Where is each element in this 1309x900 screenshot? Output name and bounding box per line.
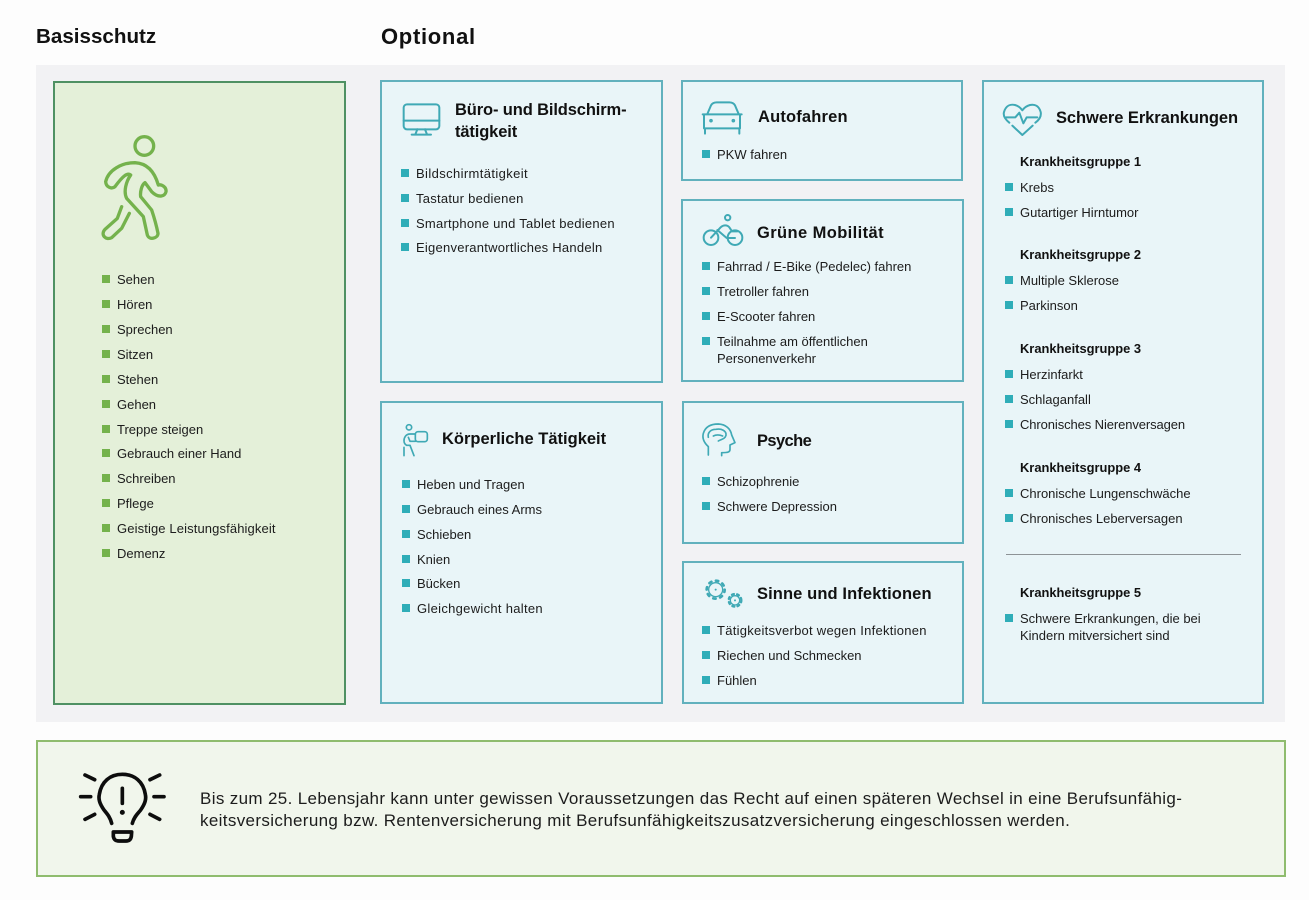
list: Sinne items: Fühlen — [717, 673, 757, 688]
callout text: keitsversicherung bzw. Rentenversicherung mit Berufsunfähigkeitszusatzversicherung eingeschlossen werden. — [200, 811, 1070, 830]
icon: walking person — [102, 135, 168, 240]
group 3: Krankheitsgruppe 3 — [1020, 341, 1141, 356]
icon: person carrying box — [403, 424, 428, 456]
icon: gears — [705, 579, 742, 608]
heading: Autofahren: Autofahren — [758, 108, 848, 126]
list: Büro items: Tastatur bedienen — [416, 191, 524, 206]
group 4 — [1005, 460, 1191, 526]
panel: Basisschutz — [53, 81, 346, 705]
list: Basisschutz items: Hören — [117, 297, 152, 312]
icon: cyclist — [702, 214, 744, 246]
panel: Grüne Mobilität — [681, 199, 964, 382]
list: Grüne Mobilität items: Tretroller fahren — [717, 284, 809, 299]
list: Körperliche items: Gebrauch eines Arms — [417, 502, 542, 517]
heading: Sinne und Infektionen: Sinne und Infektionen — [757, 585, 932, 603]
heading: Basisschutz: Basisschutz — [36, 25, 156, 48]
grey background panel — [36, 65, 1285, 722]
list: Büro items: Smartphone und Tablet bedienen — [416, 216, 615, 231]
list: Psyche items: Schizophrenie — [717, 474, 799, 489]
group 4: Krankheitsgruppe 4 — [1020, 460, 1141, 475]
icon: light bulb — [78, 772, 166, 843]
list: Sinne items: Riechen und Schmecken — [717, 648, 862, 663]
list: Basisschutz items: Gehen — [117, 397, 156, 412]
icon: monitor — [402, 103, 440, 136]
list: Grüne Mobilität items — [702, 259, 911, 366]
group 5: Krankheitsgruppe 5 — [1020, 585, 1141, 600]
list: Sinne items — [702, 623, 927, 688]
heading: Schwere Erkrankungen: Schwere Erkrankungen — [1056, 109, 1238, 127]
list: Basisschutz items: Pflege — [117, 496, 154, 511]
list: Grüne Mobilität items: Teilnahme am öffentlichen — [717, 334, 868, 349]
icon: head with brain — [702, 423, 736, 456]
heading: Optional: Optional — [381, 24, 476, 49]
heading: Psyche: Psyche — [757, 432, 811, 450]
list: Basisschutz items: Sehen — [117, 272, 155, 287]
group 5 — [1005, 585, 1201, 643]
group 3 — [1005, 341, 1185, 432]
list: Psyche items — [702, 474, 837, 514]
callout text: Bis zum 25. Lebensjahr kann unter gewissen Voraussetzungen das Recht auf einen späteren Wechsel in eine Berufsunfähig- — [200, 789, 1182, 808]
icon: heart with pulse — [1002, 104, 1042, 136]
panel: Sinne und Infektionen — [682, 561, 964, 704]
list: Basisschutz items: Demenz — [117, 546, 165, 561]
heading: Körperliche Tätigkeit: Körperliche Tätigkeit — [442, 430, 606, 448]
list: Büro items: Eigenverantwortliches Handeln — [416, 240, 602, 255]
group 3: Herzinfarkt — [1020, 367, 1083, 382]
list: Körperliche items — [402, 477, 543, 616]
group 5: Kindern mitversichert sind — [1020, 628, 1170, 643]
list: Basisschutz items: Schreiben — [117, 471, 176, 486]
panel: Schwere Erkrankungen — [982, 80, 1264, 704]
list: Psyche items: Schwere Depression — [717, 499, 837, 514]
list: Grüne Mobilität items: Personenverkehr — [717, 351, 816, 366]
list: Basisschutz items: Gebrauch einer Hand — [117, 446, 241, 461]
group 3: Chronisches Nierenversagen — [1020, 417, 1185, 432]
list: Körperliche items: Heben und Tragen — [417, 477, 525, 492]
group 1: Krankheitsgruppe 1 — [1020, 154, 1141, 169]
list: Basisschutz items: Geistige Leistungsfähigkeit — [117, 521, 276, 536]
callout panel — [36, 740, 1286, 877]
list: Körperliche items: Knien — [417, 552, 450, 567]
list: Sinne items: Tätigkeitsverbot wegen Infektionen — [717, 623, 927, 638]
list: Basisschutz items: Treppe steigen — [117, 422, 203, 437]
callout text — [200, 789, 1182, 830]
group 2: Multiple Sklerose — [1020, 273, 1119, 288]
group 2: Krankheitsgruppe 2 — [1020, 247, 1141, 262]
icon: car — [702, 101, 743, 135]
group 2: Parkinson — [1020, 298, 1078, 313]
list: Körperliche items: Bücken — [417, 576, 460, 591]
panel: Psyche — [682, 401, 964, 544]
heading: Büro- und Bildschirmtätigkeit: Büro- und Bildschirm- — [455, 101, 626, 119]
list: Grüne Mobilität items: E-Scooter fahren — [717, 309, 815, 324]
list: Basisschutz items — [102, 272, 276, 561]
heading: Büro- und Bildschirmtätigkeit — [455, 101, 626, 141]
panel: Büro- und Bildschirmtätigkeit — [380, 80, 663, 383]
list: Büro items: Bildschirmtätigkeit — [416, 166, 528, 181]
list: Grüne Mobilität items: Fahrrad / E-Bike (Pedelec) fahren — [717, 259, 911, 274]
group 4: Chronisches Leberversagen — [1020, 511, 1183, 526]
group 2 — [1005, 247, 1141, 313]
list: Büro items — [401, 166, 615, 255]
panel: Autofahren — [681, 80, 963, 181]
list: Basisschutz items: Sprechen — [117, 322, 173, 337]
heading: Grüne Mobilität: Grüne Mobilität — [757, 224, 884, 242]
panel: Körperliche Tätigkeit — [380, 401, 663, 704]
list: Basisschutz items: Sitzen — [117, 347, 153, 362]
list: Autofahren items: PKW fahren — [717, 147, 787, 162]
group 4: Chronische Lungenschwäche — [1020, 486, 1191, 501]
heading: Büro- und Bildschirmtätigkeit: tätigkeit — [455, 123, 517, 141]
group 1: Krebs — [1020, 180, 1054, 195]
group 1 — [1005, 154, 1141, 220]
list: Basisschutz items: Stehen — [117, 372, 158, 387]
list: Körperliche items: Schieben — [417, 527, 471, 542]
group 5: Schwere Erkrankungen, die bei — [1020, 611, 1201, 626]
group 3: Schlaganfall — [1020, 392, 1091, 407]
group 1: Gutartiger Hirntumor — [1020, 205, 1138, 220]
list: Körperliche items: Gleichgewicht halten — [417, 601, 543, 616]
